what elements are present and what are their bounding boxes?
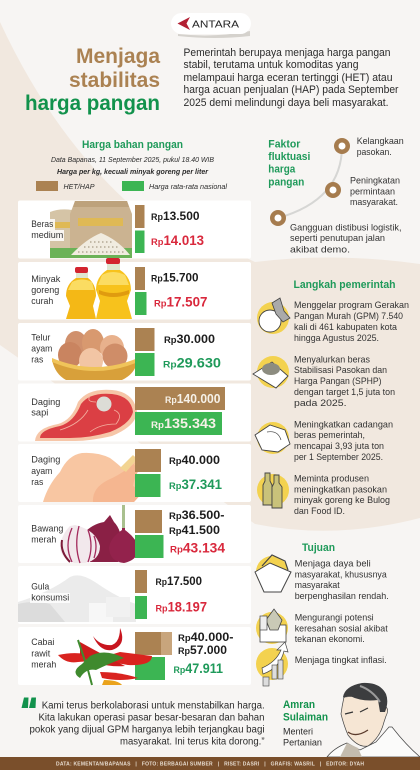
- step text: meningkatkan pasokan: [294, 485, 387, 495]
- title: [25, 45, 160, 115]
- label: sapi: [31, 408, 48, 418]
- icon: sugar pile: [18, 575, 136, 622]
- factors text: Peningkatan: [350, 175, 400, 185]
- bars with values: Rp140.000: [165, 391, 220, 406]
- values: Rp40.000-: [178, 630, 234, 644]
- step text: Stabilisasi Pasokan dan: [294, 365, 387, 375]
- step text: [294, 300, 409, 343]
- speaker name: Amran: [283, 699, 315, 711]
- icon: chicken: [43, 453, 144, 502]
- intro text: Pemerintah berupaya menjaga harga pangan: [184, 47, 390, 59]
- step text: Menggelar program Gerakan: [294, 300, 409, 310]
- icon: quote mark: [22, 698, 36, 708]
- values: Rp30.000: [164, 332, 215, 346]
- values: Rp43.134: [170, 541, 225, 556]
- label: Telur: [31, 333, 50, 343]
- timeline: [270, 138, 350, 226]
- values: Rp41.500: [169, 523, 220, 537]
- icon: rice sack: [255, 422, 290, 454]
- step text: Harga Pangan (SPHP): [294, 376, 382, 386]
- goal text: keresahan sosial akibat: [295, 624, 388, 634]
- step text: [294, 474, 390, 516]
- intro text: harga acuan penjualan (HAP) pada September: [184, 84, 399, 96]
- step text: beras pemerintah,: [294, 430, 365, 440]
- values: [156, 574, 207, 615]
- intro text: 2025 demi melindungi daya beli masyarakat.: [184, 97, 388, 109]
- values: Rp13.500: [151, 209, 200, 223]
- heading: [268, 138, 310, 189]
- panel: Telur ayam ras: [18, 323, 251, 380]
- values: Rp47.911: [174, 661, 223, 676]
- step text: dan Food ID.: [294, 506, 345, 516]
- step text: Menyalurkan beras: [294, 355, 370, 365]
- label: Daging: [31, 455, 60, 465]
- values: Rp29.630: [163, 356, 221, 371]
- step text: minyak goreng ke Bulog: [294, 495, 390, 505]
- factors text: [290, 136, 404, 254]
- goal text: masyarakat, khususnya: [295, 570, 388, 580]
- values: Rp36.500-: [169, 508, 224, 522]
- icon: chilies: [58, 628, 152, 685]
- icon: oil bottles: [257, 473, 289, 508]
- step text: [294, 355, 395, 408]
- panel: langkah pemerintah: [253, 279, 409, 516]
- label: [31, 524, 63, 545]
- label: [30, 219, 64, 241]
- label: Beras: [31, 219, 54, 229]
- title: harga pangan: [25, 92, 160, 115]
- bars with values: Rp135.343: [151, 415, 216, 431]
- panel: faktor fluktuasi: [268, 136, 404, 254]
- intro text: stabil, terutama untuk komoditas yang: [184, 59, 358, 71]
- label: rawit: [31, 649, 51, 659]
- step text: Meminta produsen: [294, 474, 369, 484]
- goal text: Mengurangi potensi: [295, 613, 374, 623]
- bars: [135, 632, 172, 680]
- heading: Tujuan: [302, 542, 335, 554]
- label: ayam: [31, 344, 53, 354]
- goal text: Menjaga daya beli: [295, 559, 371, 569]
- bars: [135, 328, 154, 376]
- goal text: Menjaga tingkat inflasi.: [295, 655, 387, 665]
- goal text: berpenghasilan rendah.: [295, 591, 389, 601]
- label: ras: [31, 477, 44, 487]
- quote text: pokok yang dijual GPM harganya lebih terjangkau bagi: [30, 724, 264, 736]
- step text: pada 2025.: [294, 398, 346, 408]
- label: Daging: [31, 397, 60, 407]
- panel: Beras medium: [18, 200, 251, 258]
- label: [31, 455, 60, 487]
- label: Bawang: [31, 524, 63, 534]
- bars: [135, 449, 161, 497]
- speaker name: Menteri: [283, 726, 313, 738]
- unit note: Harga per kg, kecuali minyak goreng per liter: [57, 167, 209, 176]
- values: Rp57.000: [178, 643, 227, 657]
- bars: [135, 570, 147, 619]
- values: Rp14.013: [151, 233, 204, 248]
- label: merah: [31, 535, 56, 545]
- quote text: masyarakat. Ini terus kita dorong.”: [120, 736, 264, 748]
- factors text: akibat demo.: [290, 244, 350, 254]
- values: Rp17.500: [156, 574, 202, 588]
- label: medium: [31, 230, 64, 240]
- step text: [294, 420, 393, 462]
- label: [31, 333, 53, 364]
- factors text: Gangguan distibusi logistik,: [290, 222, 402, 232]
- heading: Harga bahan pangan: Harga bahan pangan: [82, 139, 183, 151]
- panel: Daging sapi: [18, 384, 251, 442]
- footer credits: DATA: KEMENTAN/BAPANAS | FOTO: BERBAGAI SUMBER | RISET: DASRI | GRAFIS: WASRIL | EDITOR: DYAH: [56, 762, 364, 768]
- heading: pangan: [268, 177, 305, 189]
- icon: rice bags: [50, 201, 132, 258]
- values: [169, 508, 225, 556]
- values: Rp37.341: [169, 477, 222, 492]
- speaker name: [283, 699, 328, 748]
- values: [174, 630, 234, 676]
- quote text: [30, 700, 265, 748]
- heading: fluktuasi: [268, 151, 310, 163]
- icon: basket: [255, 555, 291, 592]
- step text: dengan target 1,5 juta ton: [294, 387, 395, 397]
- data source note: Data Bapanas, 11 September 2025, pukul 18.40 WIB: [51, 155, 214, 164]
- goal text: [295, 613, 388, 644]
- panel: Gula konsumsi: [18, 566, 251, 624]
- values: Rp40.000: [169, 453, 220, 467]
- speaker name: Pertanian: [283, 738, 322, 748]
- label: [30, 581, 70, 603]
- values: [169, 453, 222, 492]
- bars: [135, 267, 146, 315]
- step text: kali di 461 kabupaten kota: [294, 322, 398, 332]
- label: [31, 274, 61, 306]
- quote text: Kami terus berkolaborasi untuk menstabilkan harga.: [42, 700, 265, 712]
- label: merah: [31, 659, 56, 669]
- values: [151, 271, 208, 310]
- heading: Faktor: [268, 138, 301, 150]
- heading: harga: [268, 164, 296, 176]
- values: [163, 332, 221, 371]
- heading: Langkah pemerintah: [294, 279, 396, 291]
- logo: ANTARA: [171, 13, 251, 38]
- icon: rising coins: [256, 642, 288, 686]
- label: Minyak: [31, 274, 61, 284]
- icon: money stack: [256, 609, 288, 644]
- factors text: masyarakat.: [350, 197, 398, 207]
- title: Menjaga: [76, 45, 160, 68]
- icon: oil bottles: [66, 258, 132, 319]
- label: curah: [31, 296, 53, 306]
- icon: apple: [257, 298, 290, 334]
- quote text: Kita lakukan operasi pasar besar-besaran dan bahan: [38, 712, 264, 724]
- speaker name: Sulaiman: [283, 712, 328, 724]
- factors text: permintaan: [350, 186, 395, 196]
- label: [31, 637, 56, 669]
- title: stabilitas: [69, 69, 160, 92]
- factors text: Kelangkaan: [357, 136, 404, 146]
- step text: per 1 September 2025.: [294, 452, 383, 462]
- icon: egg basket: [52, 329, 138, 380]
- label: Cabai: [31, 637, 54, 647]
- label: ras: [31, 354, 44, 364]
- bars: [135, 510, 164, 558]
- label: Gula: [31, 581, 50, 591]
- panel: Minyak goreng curah: [18, 258, 251, 320]
- goal text: tekanan ekonomi.: [295, 634, 365, 644]
- legend: [36, 181, 227, 191]
- footer credits: [0, 757, 420, 770]
- panel: Cabai rawit merah: [18, 627, 251, 685]
- legend: Harga rata-rata nasional: [149, 182, 227, 191]
- label: konsumsi: [31, 593, 69, 603]
- panel: tujuan: [255, 542, 389, 686]
- portrait: minister: [327, 683, 420, 757]
- icon: red onions: [60, 505, 139, 563]
- values: [151, 209, 204, 248]
- step text: Pangan Murah (GPM) 7.540: [294, 311, 403, 321]
- factors text: pasokan.: [357, 147, 392, 157]
- values: Rp15.700: [151, 271, 199, 285]
- intro text: [184, 47, 399, 109]
- panel: Daging ayam ras: [18, 444, 251, 502]
- factors text: seperti penutupan jalan: [290, 233, 385, 243]
- legend: HET/HAP: [64, 182, 95, 191]
- label: goreng: [31, 285, 59, 295]
- bars: [135, 205, 144, 253]
- icon: steak: [35, 390, 137, 441]
- step text: hingga Agustus 2025.: [294, 333, 379, 343]
- step text: mencapai 3,93 juta ton: [294, 441, 384, 451]
- panel: Bawang merah: [18, 505, 251, 563]
- step text: Meningkatkan cadangan: [294, 420, 393, 430]
- goal text: [295, 559, 389, 601]
- icon: rice tray: [253, 356, 289, 388]
- label: ayam: [31, 466, 53, 476]
- goal text: masyarakat: [295, 580, 340, 590]
- values: Rp17.507: [154, 295, 208, 310]
- values: Rp18.197: [156, 600, 207, 615]
- label: [31, 397, 60, 418]
- logo: ANTARA: ANTARA: [192, 20, 239, 30]
- intro text: melampaui harga eceran tertinggi (HET) atau: [184, 72, 392, 84]
- bars with values: [135, 387, 225, 435]
